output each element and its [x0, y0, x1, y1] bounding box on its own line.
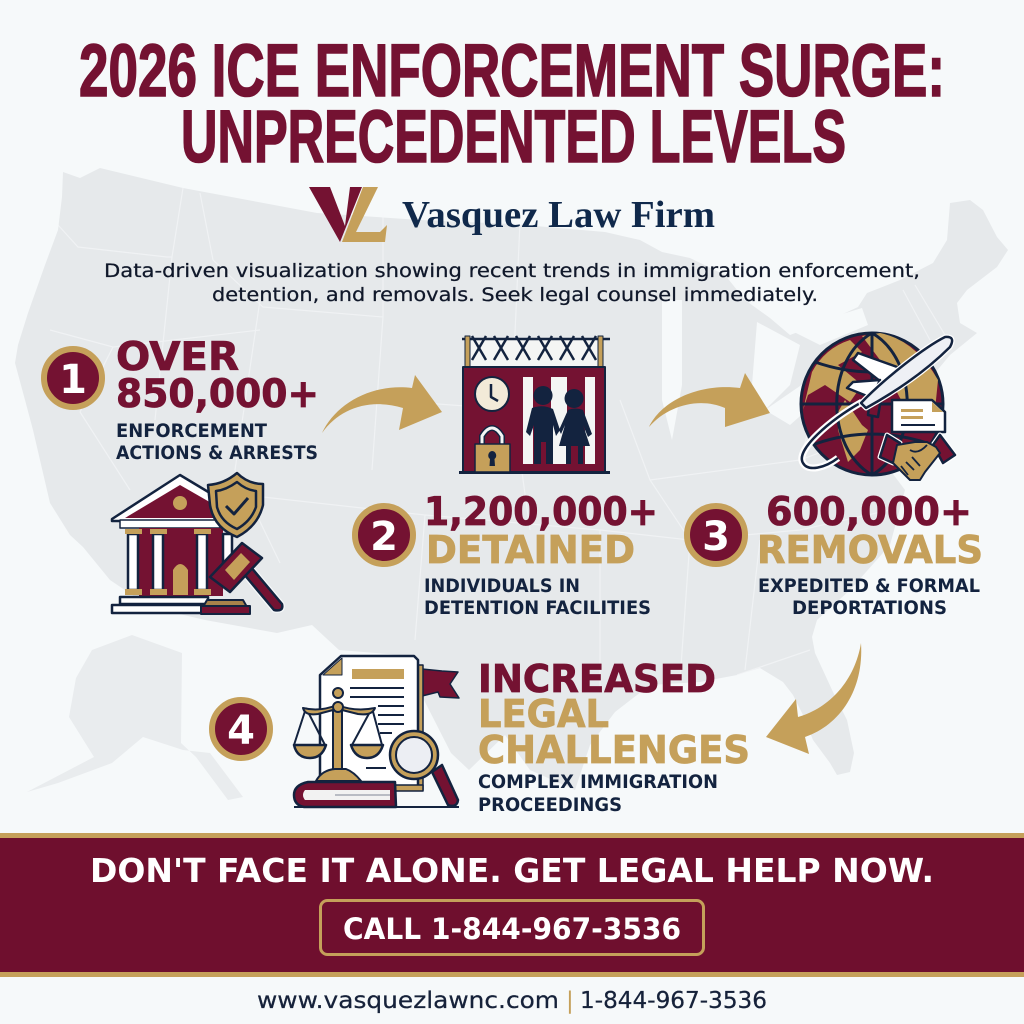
step 1 text: [116, 335, 319, 464]
step 2 text: DETAINED: [426, 528, 635, 572]
step 3 text: DEPORTATIONS: [792, 597, 947, 619]
step 4 badge: 4: [227, 708, 255, 754]
call to action banner: [0, 833, 1024, 977]
icon: globe, plane, document and handshake: [801, 333, 955, 480]
footer contact line: |: [566, 988, 574, 1014]
step 1 text: ENFORCEMENT: [116, 420, 267, 442]
subtitle: [104, 260, 920, 306]
footer contact line: www.vasquezlawnc.com: [257, 988, 559, 1014]
footer contact line: 1-844-967-3536: [580, 988, 767, 1014]
step 2 text: 1,200,000+: [424, 490, 658, 535]
step 1 text: ACTIONS & ARRESTS: [116, 442, 318, 464]
arrow: step 3 to step 4: [766, 643, 861, 754]
logo: Vasquez Law Firm: [402, 194, 715, 236]
step 2 text: [424, 490, 658, 619]
footer contact line: [257, 988, 767, 1014]
step 3 text: [757, 490, 983, 619]
step 1 text: 850,000+: [116, 372, 319, 417]
subtitle: Data-driven visualization showing recent trends in immigration enforcement,: [104, 260, 920, 282]
arrow: step 1 to step 2: [322, 375, 442, 433]
call to action banner: DON'T FACE IT ALONE. GET LEGAL HELP NOW.: [90, 851, 934, 890]
logo: [309, 187, 715, 242]
step 4 text: LEGAL: [478, 692, 609, 736]
step 4 text: PROCEEDINGS: [478, 794, 622, 816]
title: [79, 29, 945, 178]
step 2 badge: [355, 506, 413, 564]
arrow: step 2 to step 3: [649, 373, 770, 427]
step 3 badge: [687, 506, 745, 564]
step 4 text: CHALLENGES: [478, 728, 750, 772]
step 4 text: INCREASED: [478, 657, 716, 701]
step 3 text: EXPEDITED & FORMAL: [758, 575, 980, 597]
step 3 text: REMOVALS: [757, 528, 983, 572]
step 2 text: INDIVIDUALS IN: [424, 575, 580, 597]
step 1 badge: [44, 349, 102, 407]
step 1 text: OVER: [116, 335, 239, 380]
step 3 text: 600,000+: [766, 490, 972, 535]
icon: courthouse, shield and gavel: [112, 473, 282, 614]
step 4 badge: [212, 700, 270, 758]
step 4 text: [478, 657, 750, 816]
call to action banner: CALL 1-844-967-3536: [343, 912, 681, 946]
icon: detention facility: [459, 336, 610, 474]
step 1 badge: 1: [59, 357, 87, 403]
subtitle: detention, and removals. Seek legal counsel immediately.: [212, 284, 818, 306]
background map of the United States: [15, 168, 1008, 800]
step 2 badge: 2: [370, 514, 398, 560]
step 4 text: COMPLEX IMMIGRATION: [478, 771, 718, 793]
step 3 badge: 3: [702, 514, 730, 560]
icon: legal document, scales, book and magnifier: [294, 656, 459, 808]
step 2 text: DETENTION FACILITIES: [424, 597, 651, 619]
